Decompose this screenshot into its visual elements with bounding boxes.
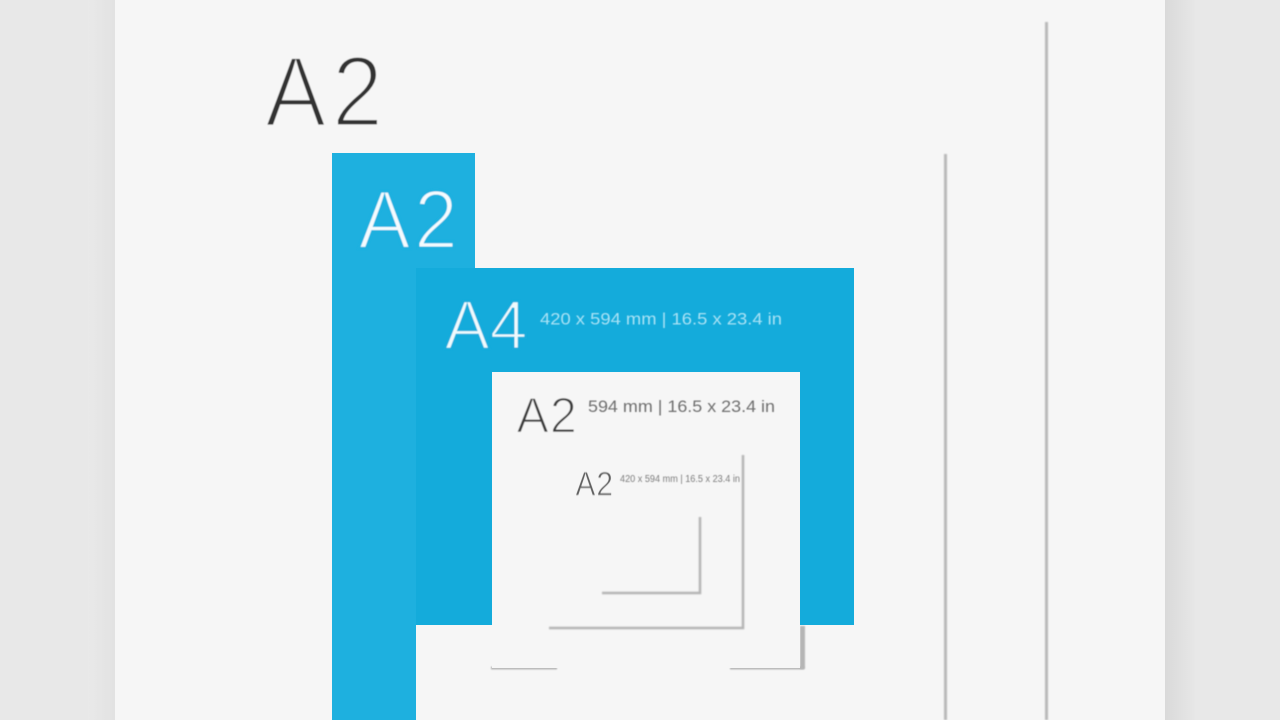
- panel: innermost sheet edge: [602, 517, 700, 593]
- panel: blue A4 sheet: [416, 268, 854, 625]
- text: inner dimensions: 420 x 594 mm | 16.5 x 23.4 in: [620, 474, 740, 485]
- text: white sheet dimensions: 594 mm | 16.5 x 23.4 in: [588, 398, 775, 416]
- panel: second sheet edge: [944, 154, 947, 720]
- label: white sheet A2: A2: [516, 388, 578, 444]
- text: A4 dimensions: 420 x 594 mm | 16.5 x 23.4 in: [540, 310, 782, 328]
- label: blue sheet A2: A2: [358, 174, 461, 267]
- label: A4: A4: [444, 286, 528, 364]
- panel: inner sheet edge: [549, 455, 743, 628]
- panel: white sheet: [491, 372, 805, 670]
- heading: outer A2 label: A2: [265, 36, 389, 148]
- label: inner A2: A2: [576, 465, 614, 503]
